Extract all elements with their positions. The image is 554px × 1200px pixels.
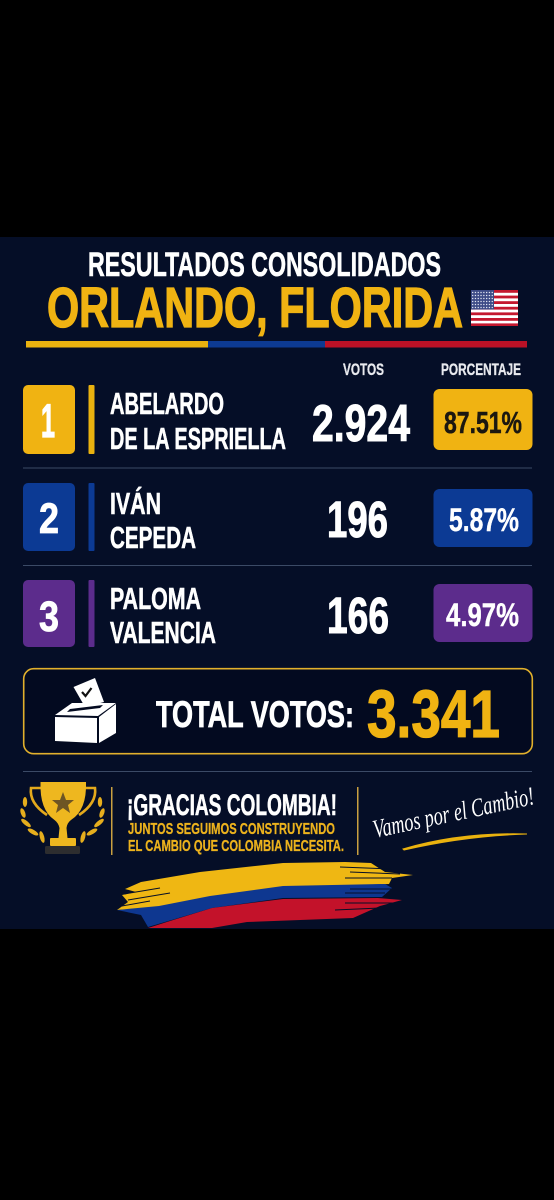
candidate surname: DE LA ESPRIELLA (110, 421, 286, 456)
thank-you heading: ¡GRACIAS COLOMBIA! (127, 789, 337, 822)
vote count: 2.924 (312, 395, 410, 453)
row 2: Iván Cepeda (23, 483, 532, 555)
percentage badge (434, 584, 532, 642)
rank badge 1 (23, 385, 75, 454)
brush streaks (122, 867, 400, 910)
row 3: Paloma Valencia (23, 580, 532, 650)
slogan swoosh (403, 834, 527, 850)
panel: total votes (24, 669, 532, 754)
percentage badge (434, 489, 532, 547)
thank-you line 2: EL CAMBIO QUE COLOMBIA NECESITA. (128, 838, 344, 855)
percentage value: 5.87% (449, 502, 519, 538)
candidate name: PALOMA (110, 581, 201, 616)
percentage badge (434, 389, 532, 450)
candidate surname: VALENCIA (110, 615, 216, 650)
total label: TOTAL VOTOS: (156, 694, 354, 735)
icon: US flag (471, 290, 518, 326)
vote count: 196 (327, 491, 388, 548)
slogan (370, 781, 537, 850)
icon: ballot box (55, 678, 116, 743)
percentage value: 87.51% (444, 405, 522, 440)
thank-you message (127, 789, 344, 855)
row 1: Abelardo de la Espriella (23, 385, 532, 456)
column header: porcentaje: PORCENTAJE (441, 361, 521, 379)
accent bar (88, 385, 94, 454)
column header: votos: VOTOS (343, 361, 384, 379)
Colombian flag brush stroke (117, 862, 413, 928)
icon: trophy with laurels (19, 782, 106, 854)
vote count: 166 (327, 587, 389, 644)
candidate name: ABELARDO (110, 386, 224, 421)
panel: background (0, 237, 554, 929)
rank badge 2 (23, 483, 75, 551)
thank-you line 1: JUNTOS SEGUIMOS CONSTRUYENDO (128, 821, 335, 838)
candidate surname: CEPEDA (110, 520, 196, 555)
rank number 3: 3 (39, 593, 59, 641)
percentage value: 4.97% (446, 597, 519, 633)
rank number 1: 1 (41, 394, 55, 447)
accent bar (88, 580, 94, 647)
total value: 3.341 (367, 677, 500, 752)
candidate name: IVÁN (110, 486, 161, 521)
rank badge 3 (23, 580, 75, 647)
accent bar (88, 483, 94, 551)
tricolor divider (26, 341, 527, 348)
rank number 2: 2 (39, 495, 59, 543)
